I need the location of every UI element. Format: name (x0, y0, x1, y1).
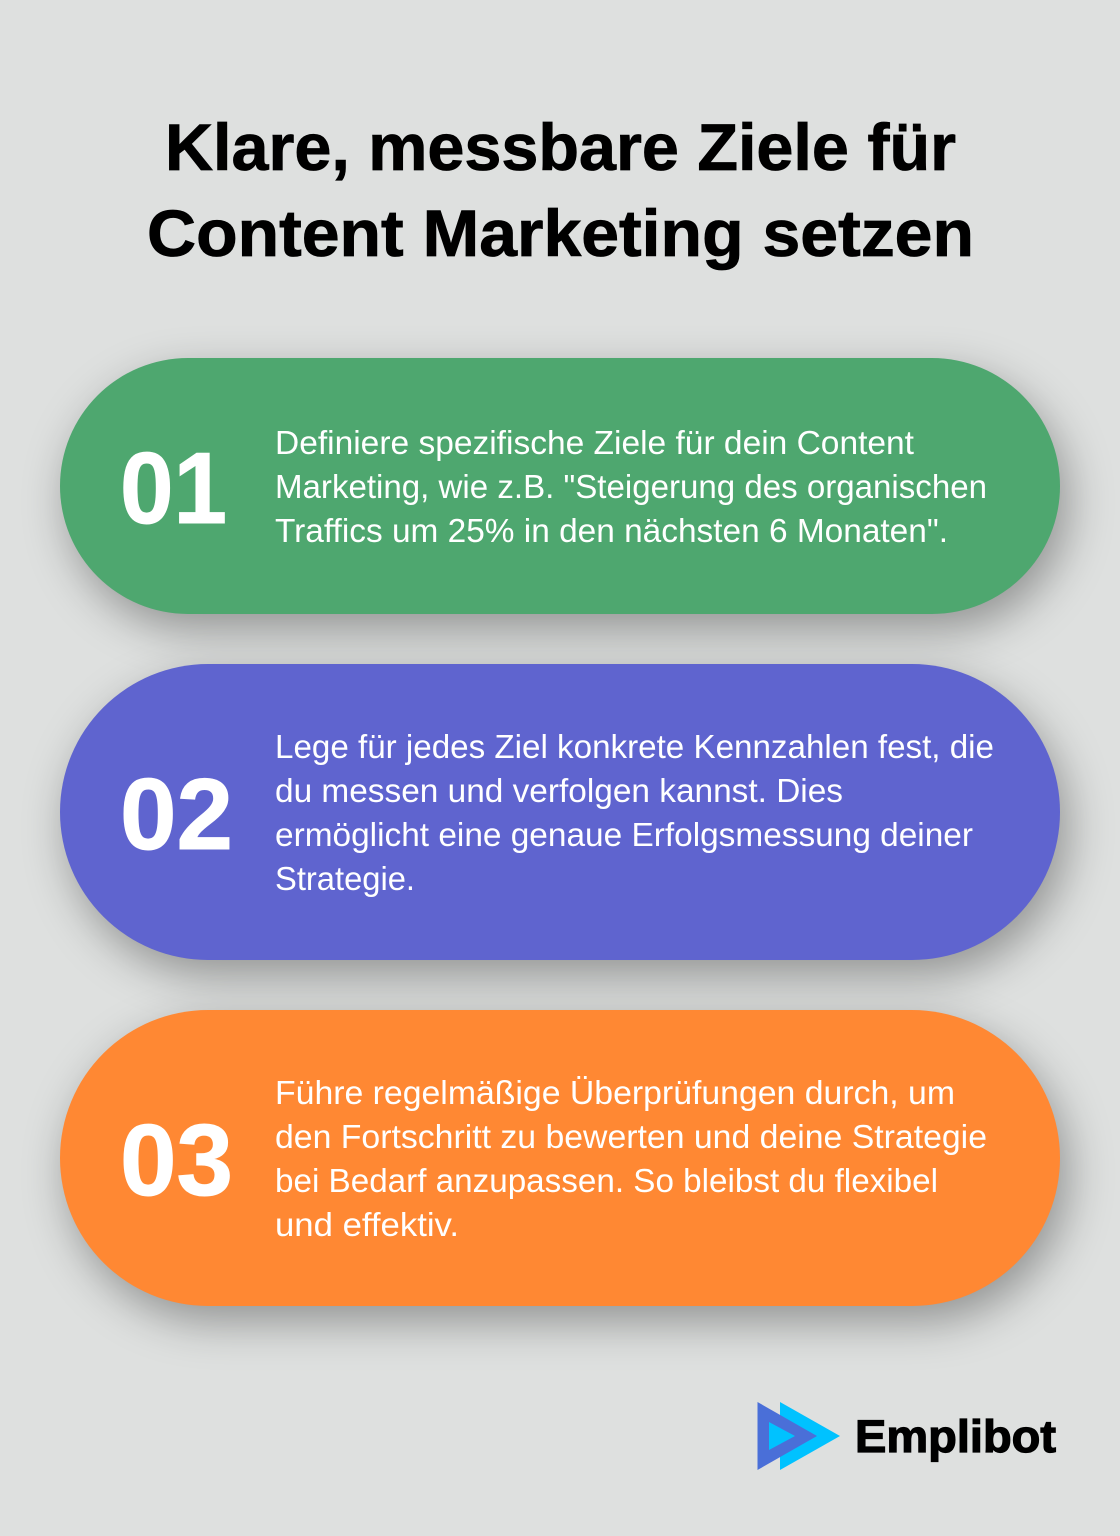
text block 01: Definiere spezifische Ziele für dein Content (275, 424, 914, 461)
title: Content Marketing setzen (147, 196, 974, 270)
text block 01 (275, 424, 987, 549)
logo wordmark: Emplibot (855, 1411, 1056, 1462)
text block 03: Führe regelmäßige Überprüfungen durch, um (275, 1074, 955, 1111)
text block 03 (275, 1074, 987, 1243)
text block 02 (275, 728, 994, 897)
step 03 content (120, 1074, 987, 1243)
number 01: 01 (120, 433, 227, 545)
number 02: 02 (120, 759, 233, 871)
number 03: 03 (120, 1105, 233, 1217)
panel: step 03 background (60, 1010, 1060, 1306)
text block 02: Lege für jedes Ziel konkrete Kennzahlen fest, die (275, 728, 994, 765)
text block 01: Marketing, wie z.B. "Steigerung des organischen (275, 468, 987, 505)
icon: play triangles (758, 1402, 840, 1470)
title (147, 110, 974, 270)
step 02 content (120, 728, 994, 897)
text block 03: und effektiv. (275, 1206, 459, 1243)
text block 02: du messen und verfolgen kannst. Dies (275, 772, 843, 809)
panel: step 01 background (60, 358, 1060, 614)
text block 02: ermöglicht eine genaue Erfolgsmessung deiner (275, 816, 973, 853)
title: Klare, messbare Ziele für (165, 110, 956, 184)
panel: step 02 background (60, 664, 1060, 960)
step 01 content (120, 424, 987, 549)
text block 03: den Fortschritt zu bewerten und deine Strategie (275, 1118, 987, 1155)
logo: Emplibot (758, 1402, 1056, 1470)
text block 03: bei Bedarf anzupassen. So bleibst du flexibel (275, 1162, 938, 1199)
text block 01: Traffics um 25% in den nächsten 6 Monaten". (275, 512, 948, 549)
text block 02: Strategie. (275, 860, 415, 897)
